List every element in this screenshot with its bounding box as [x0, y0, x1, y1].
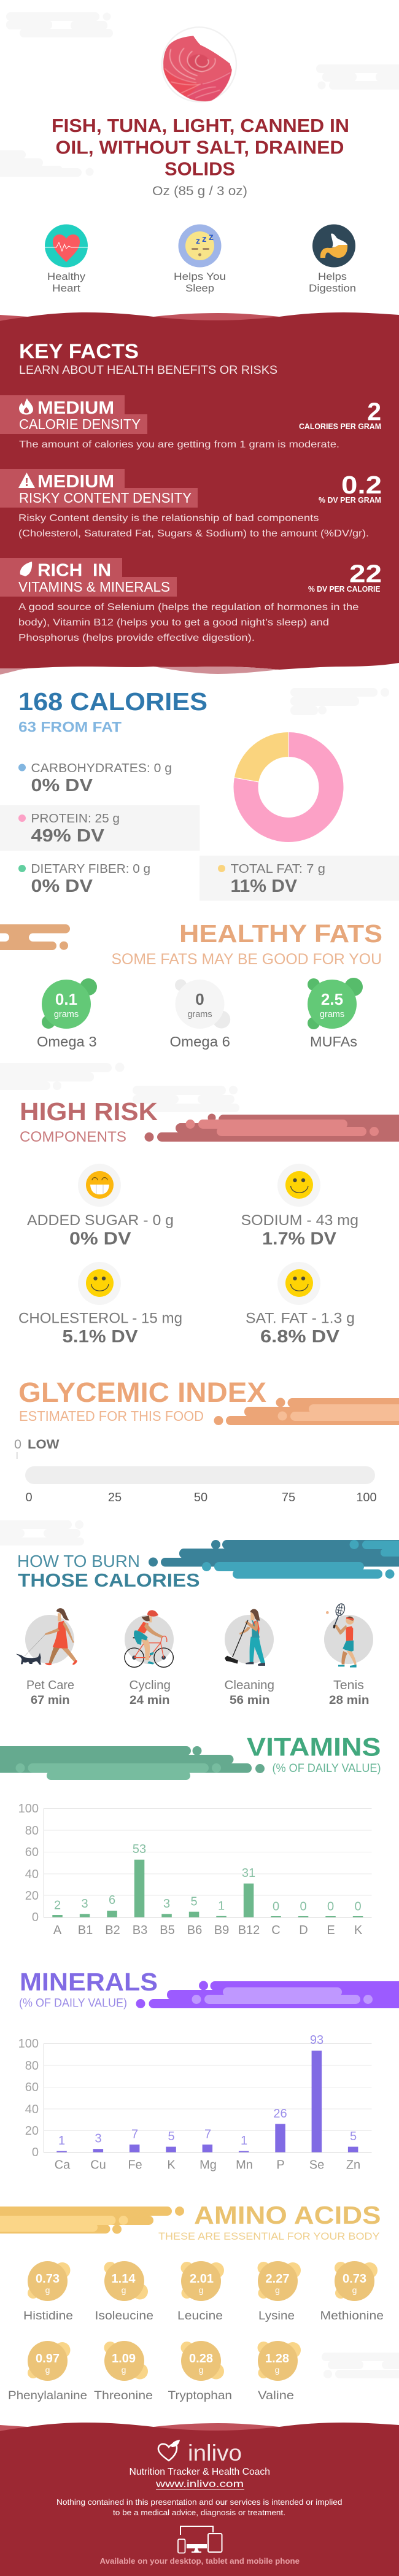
- panel: footer: [0, 2423, 399, 2576]
- risk: saturated fat: 6.8% DV: [260, 1327, 340, 1347]
- fact: calorie density: The amount of calories you are getting from 1 gram is moderate.: [19, 439, 339, 450]
- fact: rich in vitamins and minerals: 22: [349, 560, 382, 588]
- panel: key facts: [0, 312, 399, 675]
- amino: valine: Valine: [258, 2389, 294, 2402]
- icon: leaf: [20, 562, 32, 576]
- benefit: helps digestion: [309, 225, 356, 294]
- icon: sleeping face: z: [209, 232, 214, 242]
- activity: pet care: [16, 1608, 77, 1707]
- amino: tryptophan: [168, 2341, 232, 2402]
- panel: vitamins: VITAMINS: [247, 1732, 381, 1762]
- amino: isoleucine: 1.14: [112, 2272, 136, 2286]
- fact: calorie density: MEDIUM: [37, 398, 114, 418]
- stat: omega 6: Omega 6: [169, 1034, 230, 1050]
- nutrient: dietary fiber: [18, 862, 150, 896]
- amino: methionine: 0.73: [343, 2272, 366, 2286]
- fact: rich in vitamins and minerals: RICH IN: [37, 561, 111, 581]
- bar chart: vitamins: B2: [105, 1924, 120, 1937]
- bar chart: minerals: Mn: [236, 2158, 253, 2172]
- bar chart: vitamins: 2: [54, 1899, 61, 1913]
- panel: calories: 168 CALORIES: [18, 687, 207, 716]
- panel: healthy fats: [0, 919, 382, 1050]
- panel: high risk components: [18, 1097, 399, 1347]
- risk: sodium: [241, 1164, 358, 1248]
- amino: valine: 1.28: [265, 2352, 289, 2365]
- gauge axis: [25, 1491, 377, 1504]
- bar chart: vitamins: B9: [214, 1924, 229, 1937]
- amino: phenylalanine: g: [45, 2365, 50, 2375]
- bar chart: vitamins: 20: [25, 1889, 39, 1903]
- heading stripe: [145, 1113, 399, 1142]
- bar chart: vitamins: C: [271, 1924, 281, 1937]
- risk: cholesterol: 5.1% DV: [63, 1327, 138, 1347]
- amino: phenylalanine: [8, 2341, 87, 2402]
- bar chart: vitamins: B3: [133, 1924, 147, 1937]
- benefit: healthy heart: Heart: [52, 282, 80, 294]
- bar chart: minerals: 1: [58, 2134, 65, 2148]
- icon: warning: [18, 473, 35, 488]
- donut chart: [233, 732, 344, 842]
- amino: methionine: [320, 2261, 384, 2323]
- panel: minerals: (% OF DAILY VALUE): [19, 1997, 127, 2009]
- fact: risky content density: [0, 469, 382, 539]
- bar chart: minerals: P: [276, 2158, 285, 2172]
- marker: low: [14, 1437, 60, 1459]
- fact: calorie density: CALORIE DENSITY: [19, 416, 141, 432]
- amino: leucine: [177, 2261, 224, 2323]
- bar chart: vitamins: B5: [160, 1924, 175, 1937]
- bar chart: minerals: Mg: [200, 2158, 217, 2172]
- risk: cholesterol: [18, 1262, 182, 1347]
- benefit: helps digestion: Helps: [318, 271, 347, 282]
- nutrient: total fat: [200, 856, 399, 901]
- panel: high risk components: HIGH RISK: [20, 1097, 158, 1126]
- fact: risky content density: (Cholesterol, Saturated Fat, Sugars & Sodium) to the amount (%DV/gr).: [18, 528, 369, 539]
- amino: lysine: Lysine: [258, 2310, 295, 2323]
- bar chart: minerals: 93: [310, 2033, 323, 2047]
- cloud: amino: [322, 2353, 399, 2378]
- fact: calorie density: [0, 395, 381, 450]
- amino: isoleucine: g: [122, 2285, 126, 2295]
- amino: leucine: Leucine: [177, 2310, 223, 2323]
- icon: smiling face: [78, 1262, 121, 1305]
- fact: rich in vitamins and minerals: Phosphorus (helps provide effective digestion).: [18, 633, 255, 643]
- amino: leucine: g: [199, 2285, 203, 2295]
- stat: omega 6: 0: [195, 990, 204, 1008]
- panel: amino acids: [0, 2201, 399, 2402]
- nutrient: total fat: 11% DV: [231, 876, 298, 896]
- stat: omega 6: grams: [187, 1010, 212, 1019]
- bar chart: minerals: Cu: [90, 2158, 106, 2172]
- gauge bar: [25, 1466, 375, 1484]
- fact: risky content density: % DV PER GRAM: [319, 495, 381, 505]
- bar chart: minerals: [18, 2033, 372, 2172]
- amino: phenylalanine: 0.97: [36, 2352, 60, 2365]
- title: [52, 115, 349, 179]
- panel: amino acids: THESE ARE ESSENTIAL FOR YOUR BODY: [158, 2230, 379, 2242]
- icon: sleeping face: [178, 225, 221, 268]
- amino: tryptophan: Tryptophan: [168, 2389, 232, 2402]
- amino: lysine: 2.27: [266, 2272, 289, 2286]
- panel: calories: 63 FROM FAT: [18, 719, 122, 735]
- bar chart: minerals: 1: [241, 2134, 247, 2148]
- fact: risky content density: MEDIUM: [37, 472, 114, 492]
- activity: tennis: [324, 1603, 373, 1707]
- bar chart: vitamins: B12: [238, 1924, 260, 1937]
- panel: how to burn those calories: [16, 1540, 399, 1707]
- icon: smiling face: [277, 1262, 320, 1305]
- risk: saturated fat: SAT. FAT - 1.3 g: [246, 1310, 355, 1327]
- panel: calories: [0, 687, 399, 901]
- heading stripe: [149, 1540, 399, 1579]
- logo: inlivo: [158, 2440, 242, 2466]
- gauge axis: 25: [108, 1491, 122, 1504]
- bar chart: vitamins: 31: [242, 1866, 255, 1880]
- fact: risky content density: RISKY CONTENT DENSITY: [19, 490, 192, 506]
- heading stripe: [136, 1981, 399, 2008]
- heading: [19, 340, 277, 377]
- bar chart: minerals: K: [167, 2158, 176, 2172]
- fact: calorie density: CALORIES PER GRAM: [299, 422, 381, 431]
- bar chart: vitamins: 1: [218, 1899, 225, 1913]
- activity: tennis: Tenis: [333, 1679, 364, 1692]
- icon: smiling face: [277, 1164, 320, 1207]
- heading stripe: [0, 1746, 265, 1780]
- bar chart: minerals: 5: [350, 2130, 357, 2143]
- gauge axis: 75: [282, 1491, 295, 1504]
- amino: methionine: Methionine: [320, 2310, 384, 2323]
- panel: amino acids: AMINO ACIDS: [194, 2201, 381, 2229]
- bar chart: vitamins: 100: [18, 1802, 39, 1816]
- icon: woman cycling: [125, 1610, 174, 1667]
- icon: grinning face: [78, 1164, 121, 1207]
- panel: vitamins: (% OF DAILY VALUE): [273, 1762, 381, 1775]
- gauge axis: 50: [194, 1491, 207, 1504]
- fact: rich in vitamins and minerals: % DV PER CALORIE: [308, 584, 381, 594]
- bar chart: minerals: 26: [273, 2107, 287, 2121]
- amino: isoleucine: Isoleucine: [95, 2310, 153, 2323]
- amino: lysine: g: [275, 2285, 280, 2295]
- amino: phenylalanine: Phenylalanine: [8, 2389, 87, 2402]
- benefit: helps you sleep: Helps You: [174, 271, 226, 282]
- risk: added sugar: [27, 1164, 174, 1248]
- icon: sleeping face: z: [196, 236, 200, 246]
- amino: threonine: g: [122, 2365, 126, 2375]
- amino: histidine: 0.73: [36, 2272, 60, 2286]
- fact: risky content density: 0.2: [341, 471, 382, 499]
- bar chart: vitamins: 0: [354, 1900, 362, 1914]
- panel: glycemic index: GLYCEMIC INDEX: [18, 1377, 266, 1408]
- bar chart: minerals: 5: [168, 2130, 175, 2143]
- activity: pet care: Pet Care: [26, 1679, 74, 1692]
- panel: how to burn those calories: HOW TO BURN: [17, 1552, 140, 1571]
- amino: histidine: g: [45, 2285, 50, 2295]
- amino: valine: g: [275, 2365, 279, 2375]
- risk: saturated fat: [246, 1262, 355, 1347]
- bar chart: vitamins: 0: [300, 1900, 307, 1914]
- amino: isoleucine: [95, 2261, 153, 2323]
- bar chart: minerals: 7: [204, 2127, 211, 2141]
- bar chart: minerals: 20: [25, 2124, 39, 2138]
- stat: omega 6: [169, 980, 230, 1050]
- nutrient: protein: [0, 805, 200, 851]
- cloud: calories: [290, 688, 389, 715]
- amino: histidine: [23, 2261, 73, 2323]
- food image: tuna: [162, 27, 236, 102]
- activity: tennis: 28 min: [329, 1694, 370, 1707]
- bar chart: vitamins: 0: [273, 1900, 279, 1914]
- bar chart: vitamins: [18, 1802, 372, 1937]
- bar chart: vitamins: D: [299, 1924, 308, 1937]
- panel: how to burn those calories: THOSE CALORIES: [18, 1569, 200, 1591]
- cloud: burn: [0, 1520, 84, 1545]
- logo: inlivo: inlivo: [188, 2440, 242, 2466]
- disclaimer: to be a medical advice, diagnosis or treatment.: [113, 2508, 285, 2517]
- bar chart: minerals: 0: [32, 2146, 39, 2159]
- bar chart: vitamins: B1: [78, 1924, 93, 1937]
- nutrient: carbohydrates: 0% DV: [31, 776, 93, 795]
- bar chart: vitamins: E: [327, 1924, 335, 1937]
- amino: methionine: g: [352, 2285, 357, 2295]
- bar chart: vitamins: 80: [25, 1824, 39, 1838]
- stat: MUFAs: [308, 978, 363, 1050]
- bar chart: minerals: Ca: [55, 2158, 71, 2172]
- heading stripe: [0, 2207, 184, 2234]
- bar chart: vitamins: K: [354, 1924, 363, 1937]
- fact: calorie density: 2: [367, 398, 381, 426]
- title: OIL, WITHOUT SALT, DRAINED: [55, 136, 344, 158]
- benefit: healthy heart: [45, 225, 88, 294]
- website: www.inlivo.com: [155, 2479, 244, 2489]
- icon: person sweeping: [225, 1609, 274, 1666]
- bar chart: minerals: 80: [25, 2059, 39, 2073]
- bar chart: vitamins: 0: [32, 1911, 39, 1924]
- title: SOLIDS: [165, 158, 235, 179]
- nutrient: protein: 49% DV: [31, 826, 105, 846]
- availability note: Available on your desktop, tablet and mobile phone: [99, 2557, 300, 2566]
- bar chart: vitamins: A: [53, 1924, 62, 1937]
- icon: devices: [178, 2526, 222, 2553]
- benefit: healthy heart: Healthy: [47, 271, 86, 282]
- bar chart: minerals: 7: [131, 2127, 138, 2141]
- stat: omega 3: 0.1: [55, 990, 77, 1008]
- bar chart: minerals: Fe: [128, 2158, 142, 2172]
- heading: KEY FACTS: [19, 340, 139, 362]
- marker: low: LOW: [28, 1437, 60, 1452]
- panel: healthy fats: SOME FATS MAY BE GOOD FOR YOU: [112, 951, 382, 968]
- fact: rich in vitamins and minerals: A good source of Selenium (helps the regulation of hormones in the: [18, 602, 359, 613]
- fact: rich in vitamins and minerals: body), Vitamin B12 (helps you to get a good night’s sleep) and: [18, 617, 329, 628]
- bar chart: minerals: Se: [309, 2158, 324, 2172]
- bar chart: vitamins: 60: [25, 1846, 39, 1859]
- amino: threonine: [94, 2341, 153, 2402]
- benefit: helps you sleep: [174, 225, 226, 294]
- amino: valine: [258, 2341, 301, 2402]
- nutrient: carbohydrates: [18, 762, 172, 795]
- nutrient: total fat: TOTAL FAT: 7 g: [231, 862, 325, 876]
- panel: minerals: MINERALS: [20, 1968, 158, 1996]
- fact: rich in vitamins and minerals: VITAMINS & MINERALS: [18, 579, 170, 595]
- header clouds: [0, 12, 399, 177]
- bar chart: vitamins: 5: [190, 1895, 198, 1909]
- title: FISH, TUNA, LIGHT, CANNED IN: [52, 115, 349, 136]
- disclaimer: Nothing contained in this presentation and our services is intended or implied: [56, 2498, 343, 2507]
- icon: heart: [45, 225, 88, 268]
- panel: high risk components: COMPONENTS: [20, 1129, 126, 1145]
- panel: glycemic index: ESTIMATED FOR THIS FOOD: [19, 1408, 204, 1424]
- risk: cholesterol: CHOLESTEROL - 15 mg: [18, 1310, 182, 1327]
- risk: sodium: 1.7% DV: [262, 1229, 337, 1248]
- panel: minerals: [18, 1968, 399, 2172]
- panel: healthy fats: HEALTHY FATS: [179, 919, 382, 948]
- benefit: helps you sleep: Sleep: [185, 282, 214, 294]
- activity: cycling: Cycling: [129, 1679, 171, 1692]
- tagline: Nutrition Tracker & Health Coach: [129, 2467, 270, 2477]
- stat: MUFAs: grams: [320, 1010, 344, 1019]
- bar chart: vitamins: 53: [133, 1843, 146, 1856]
- bar chart: vitamins: B6: [187, 1924, 202, 1937]
- cloud: healthy fats: [0, 924, 72, 950]
- amino: threonine: Threonine: [94, 2389, 153, 2402]
- icon: tennis player: [324, 1603, 373, 1668]
- stat: omega 3: Omega 3: [37, 1034, 97, 1050]
- stat: omega 3: [37, 978, 97, 1050]
- amino: histidine: Histidine: [23, 2310, 73, 2323]
- activity: cycling: 24 min: [130, 1694, 169, 1707]
- clouds: high risk: [0, 1063, 239, 1112]
- nutrient: carbohydrates: CARBOHYDRATES: 0 g: [31, 762, 172, 775]
- benefit: helps digestion: Digestion: [309, 282, 356, 294]
- gauge axis: 0: [25, 1491, 33, 1504]
- fact: rich in vitamins and minerals: [0, 558, 382, 643]
- activity: cycling: [125, 1610, 174, 1707]
- bar chart: minerals: 3: [95, 2132, 102, 2146]
- bar chart: minerals: Zn: [346, 2158, 360, 2172]
- risk: sodium: SODIUM - 43 mg: [241, 1212, 358, 1229]
- bar chart: vitamins: 6: [109, 1893, 115, 1907]
- stat: omega 3: grams: [54, 1010, 79, 1019]
- heading stripe: [214, 1398, 399, 1425]
- icon: woman walking dog: [16, 1608, 77, 1665]
- panel: vitamins: [0, 1732, 381, 1937]
- stat: MUFAs: MUFAs: [310, 1034, 357, 1050]
- bar chart: minerals: 100: [18, 2037, 39, 2051]
- marker: low: 0: [14, 1437, 21, 1452]
- disclaimer: [56, 2498, 343, 2517]
- serving size: Oz (85 g / 3 oz): [152, 184, 247, 198]
- amino: tryptophan: 0.28: [189, 2352, 213, 2365]
- risk: added sugar: ADDED SUGAR - 0 g: [27, 1212, 174, 1229]
- nutrient: dietary fiber: DIETARY FIBER: 0 g: [31, 862, 150, 876]
- stat: MUFAs: 2.5: [321, 990, 343, 1008]
- activity: pet care: 67 min: [31, 1694, 70, 1707]
- activity: cleaning: 56 min: [230, 1694, 270, 1707]
- heading: LEARN ABOUT HEALTH BENEFITS OR RISKS: [19, 363, 277, 377]
- amino: lysine: [258, 2261, 301, 2323]
- amino: threonine: 1.09: [112, 2352, 136, 2365]
- bar chart: vitamins: 3: [81, 1897, 88, 1911]
- icon: stomach: [312, 225, 355, 268]
- activity: cleaning: Cleaning: [225, 1679, 274, 1692]
- icon: flame: [19, 398, 33, 415]
- bar chart: vitamins: 3: [163, 1897, 170, 1911]
- amino: leucine: 2.01: [190, 2272, 214, 2286]
- bar chart: vitamins: 0: [327, 1900, 334, 1914]
- nutrient: protein: PROTEIN: 25 g: [31, 812, 120, 826]
- bar chart: minerals: 40: [25, 2103, 39, 2116]
- panel: glycemic index: [14, 1377, 399, 1504]
- activity: cleaning: [225, 1609, 274, 1707]
- bar chart: vitamins: 40: [25, 1868, 39, 1881]
- fact: risky content density: Risky Content density is the relationship of bad components: [18, 513, 319, 524]
- icon: sleeping face: z: [202, 234, 206, 244]
- gauge axis: 100: [356, 1491, 377, 1504]
- risk: added sugar: 0% DV: [69, 1229, 131, 1248]
- amino: tryptophan: g: [199, 2365, 203, 2375]
- bar chart: minerals: 60: [25, 2081, 39, 2094]
- nutrient: dietary fiber: 0% DV: [31, 876, 93, 896]
